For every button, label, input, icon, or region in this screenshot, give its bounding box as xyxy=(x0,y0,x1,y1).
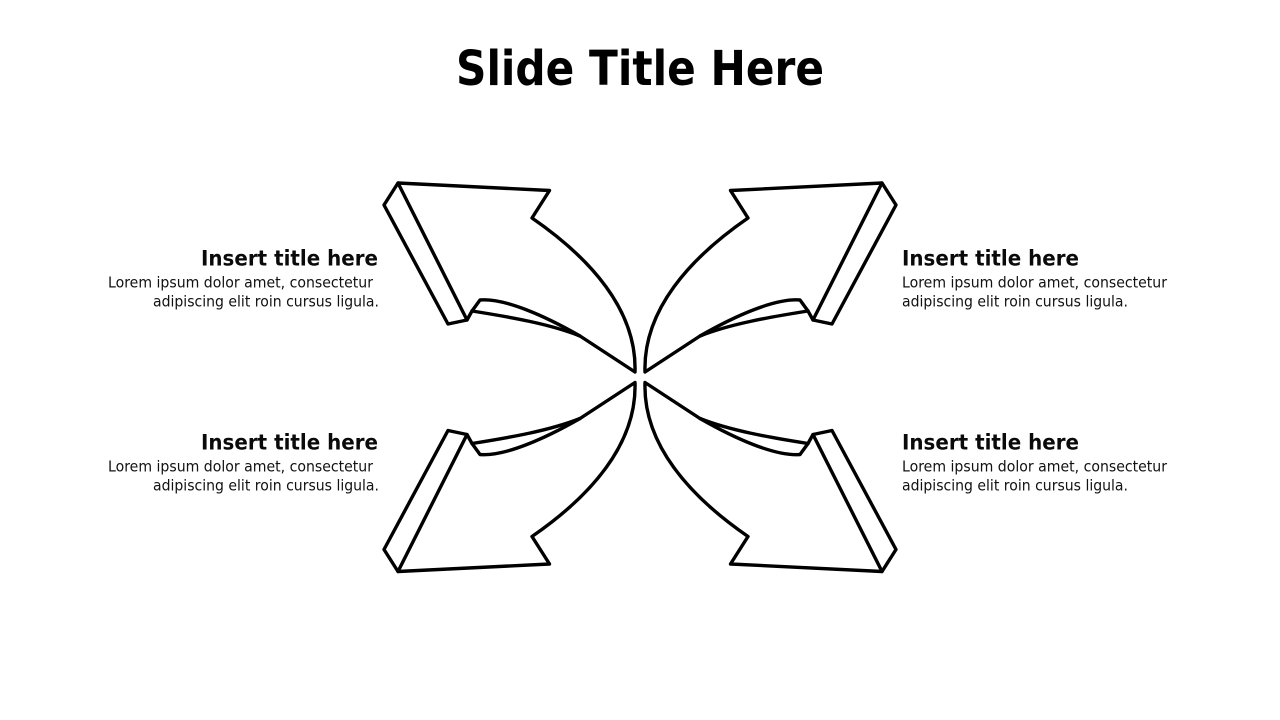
text block: bottom right: adipiscing elit roin cursus ligula. xyxy=(902,476,1128,494)
text block: top right: adipiscing elit roin cursus ligula. xyxy=(902,292,1128,310)
text block: top right: Lorem ipsum dolor amet, consectetur xyxy=(902,274,1168,292)
text block: top left: Lorem ipsum dolor amet, consectetur xyxy=(108,274,374,292)
text block: top right: Insert title here xyxy=(902,246,1079,270)
text block: top right xyxy=(902,246,1168,310)
text block: top left: adipiscing elit roin cursus ligula. xyxy=(153,292,379,310)
text block: bottom right: Insert title here xyxy=(902,430,1079,454)
arrow: top left xyxy=(384,183,635,372)
text block: bottom right xyxy=(902,430,1168,494)
text block: bottom left: Insert title here xyxy=(201,430,378,454)
text block: bottom left xyxy=(108,430,379,494)
text block: bottom right: Lorem ipsum dolor amet, consectetur xyxy=(902,458,1168,476)
arrow: bottom left xyxy=(384,382,635,572)
text block: top left xyxy=(108,246,379,310)
text block: top left: Insert title here xyxy=(201,246,378,270)
text block: bottom left: Lorem ipsum dolor amet, consectetur xyxy=(108,458,374,476)
arrow: bottom right xyxy=(645,382,896,572)
arrow: top right xyxy=(645,183,896,372)
text block: bottom left: adipiscing elit roin cursus ligula. xyxy=(153,476,379,494)
title: Slide Title Here xyxy=(456,41,824,97)
